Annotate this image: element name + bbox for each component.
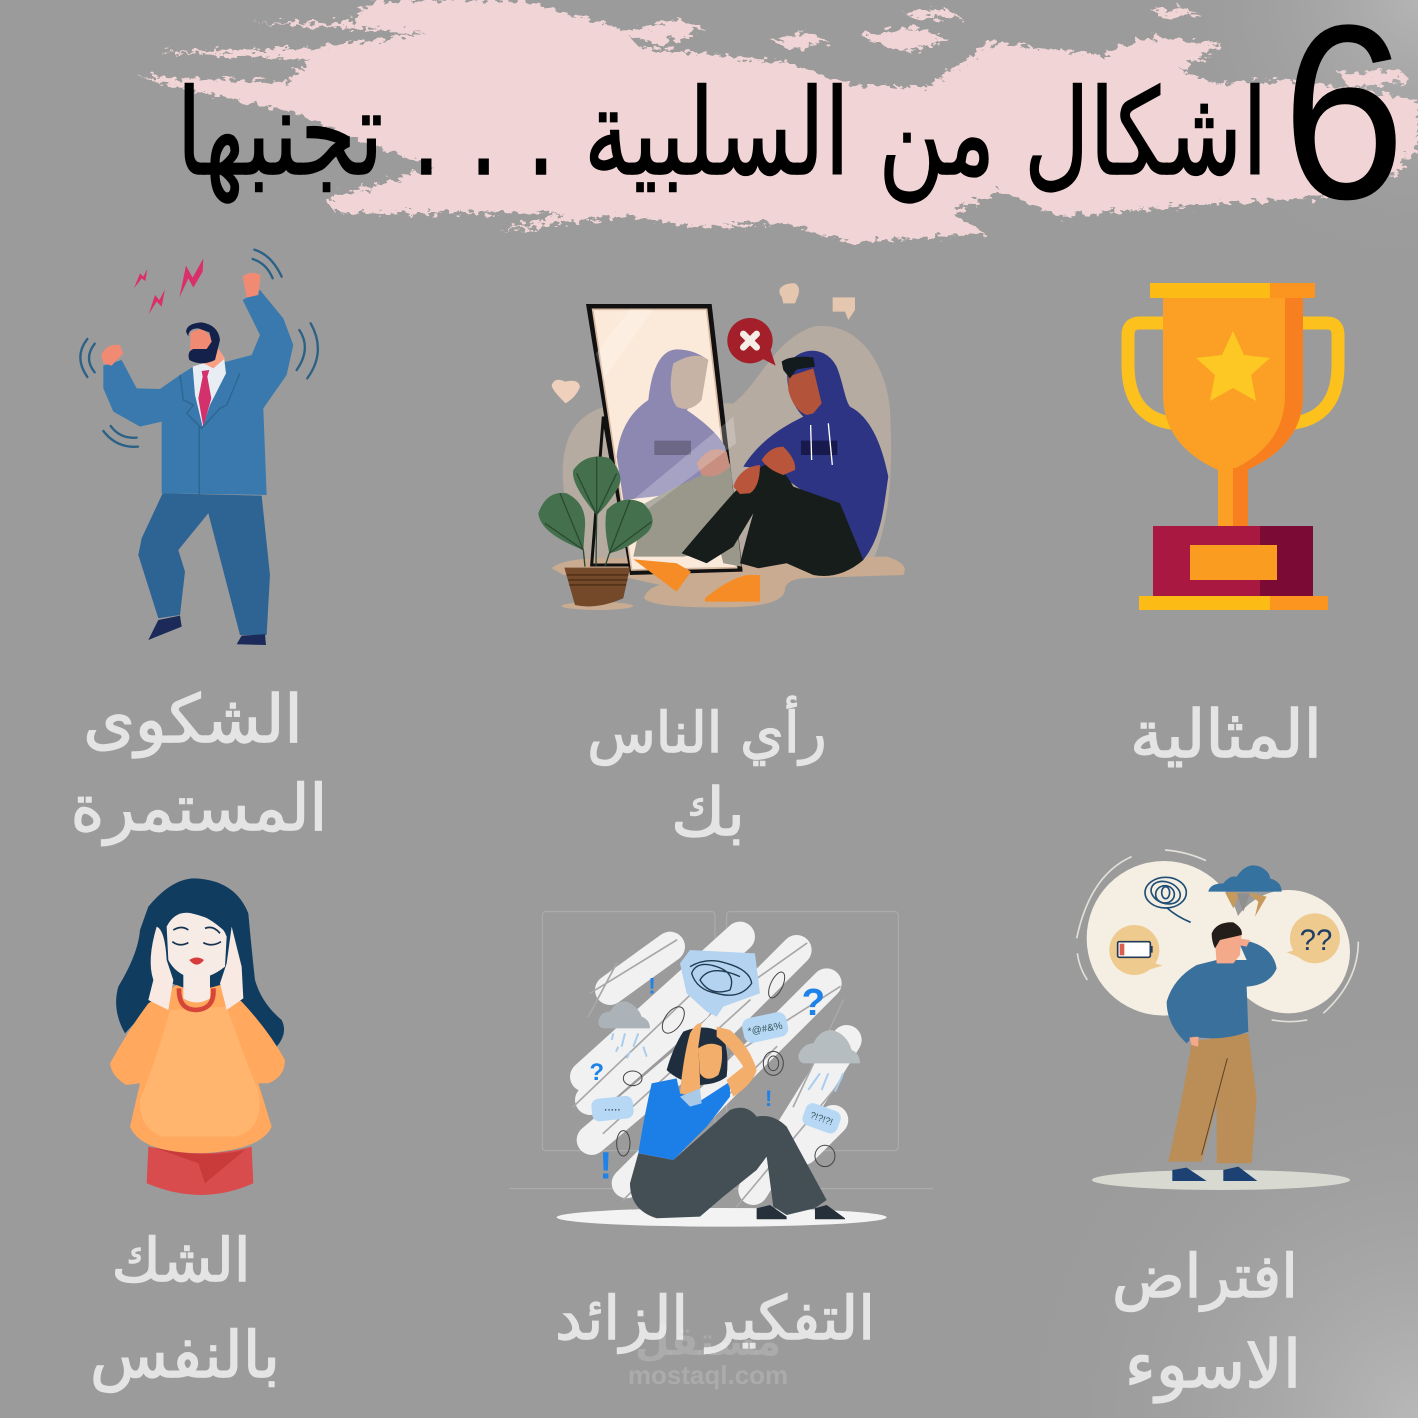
icon: battery bubble [1109,925,1163,975]
shoes [148,616,182,640]
fringe [172,903,227,930]
hands [148,927,173,1010]
icon: skull [779,283,799,303]
mirror [586,304,743,575]
icon: marks [589,973,825,1187]
sweater [110,985,285,1153]
icon: trophy cup [1163,296,1303,470]
hands [733,447,795,494]
shirt and tie [193,357,226,427]
icon: broken heart [552,380,580,403]
icon: thumbs down [833,297,855,320]
lightning marks [134,258,203,314]
eyes and mouth [172,927,221,945]
icon: trophy base [1153,526,1260,596]
icon: speech bubbles [591,1011,843,1136]
label: assuming the worst: الاسوء [1125,1326,1301,1403]
label: overthinking: التفكير الزائد [555,1284,875,1354]
scribble background [573,937,847,1207]
head [197,348,225,368]
mirror stand [592,417,630,565]
thought bubbles [1087,861,1241,1016]
jacket and arms [103,290,293,495]
lapels [180,373,240,495]
icon: star [1196,331,1270,401]
ground ellipse [557,1208,887,1227]
icon: clouds [598,1001,650,1028]
panel: overthinking woman [510,912,933,1227]
panel: self doubt woman [110,878,285,1195]
icon: question bubble [1287,913,1340,963]
pink brush stroke [138,0,1418,243]
icon: speech bubbles: ..... [604,1100,621,1114]
hair [116,878,284,1047]
icon: tangled thought bubble [680,950,760,1017]
watermark: مستقل [635,1319,781,1365]
label: assuming the worst [1112,1242,1301,1403]
face [167,913,227,979]
neck and collar [183,973,210,1002]
icon: speech bubbles: *@#&% [747,1021,784,1038]
label: self doubt: الشك [111,1226,251,1296]
label: constant complaining [71,681,327,846]
icon: marks: ? [589,1059,604,1086]
panel: trophy [1128,283,1338,610]
plant [538,457,653,606]
panel: mirror illustration [538,283,905,610]
floor shadow [552,557,905,607]
label: people's opinion [587,696,827,851]
title [177,0,1405,251]
title text: اشكال من السلبية . . . تجنبها [177,64,1267,203]
panel: angry man [80,250,318,645]
ground shadow [1092,1170,1350,1190]
shoes [633,559,691,592]
icon: tangled thought [1145,877,1191,922]
watermark [628,1319,788,1390]
speech bubble: cross [727,318,776,366]
panel: worried man [1077,850,1358,1190]
motion arcs [80,250,318,447]
icon: marks: ? [802,981,825,1024]
trousers [682,464,863,576]
label: self doubt: بالنفس [90,1319,280,1393]
arcs [1077,850,1358,1022]
head [1215,933,1242,963]
shoes [1172,1167,1257,1181]
label: constant complaining: المستمرة [71,772,327,846]
watermark: mostaql.com [628,1360,788,1390]
rain and lightning [612,1033,843,1092]
icon: speech bubbles: ?!?!?! [809,1110,834,1127]
icon: question bubble: ?? [1300,924,1332,957]
icon: marks: ! [765,1086,772,1111]
reflection of man [617,349,733,500]
label: self doubt [90,1226,280,1393]
icon: trophy handles [1128,323,1338,424]
man in blue hoodie [743,351,888,560]
icon: marks: ! [599,1144,612,1187]
woman [630,1023,845,1219]
label: assuming the worst: افتراض [1112,1242,1298,1312]
label: people's opinion: رأي الناس [587,696,827,766]
background blob [563,326,891,560]
scribble marks [617,970,835,1167]
trousers [138,493,270,635]
panes [510,912,933,1189]
label: people's opinion: بك [671,774,745,851]
fists [101,273,261,366]
trousers [1168,1033,1257,1163]
icon: marks: ! [648,973,656,998]
icon: storm cloud [1208,865,1282,917]
label: constant complaining: الشكوى [83,681,303,758]
label: perfectionism: المثالية [1130,696,1322,773]
sweater [1167,942,1277,1043]
skirt [147,1147,253,1195]
